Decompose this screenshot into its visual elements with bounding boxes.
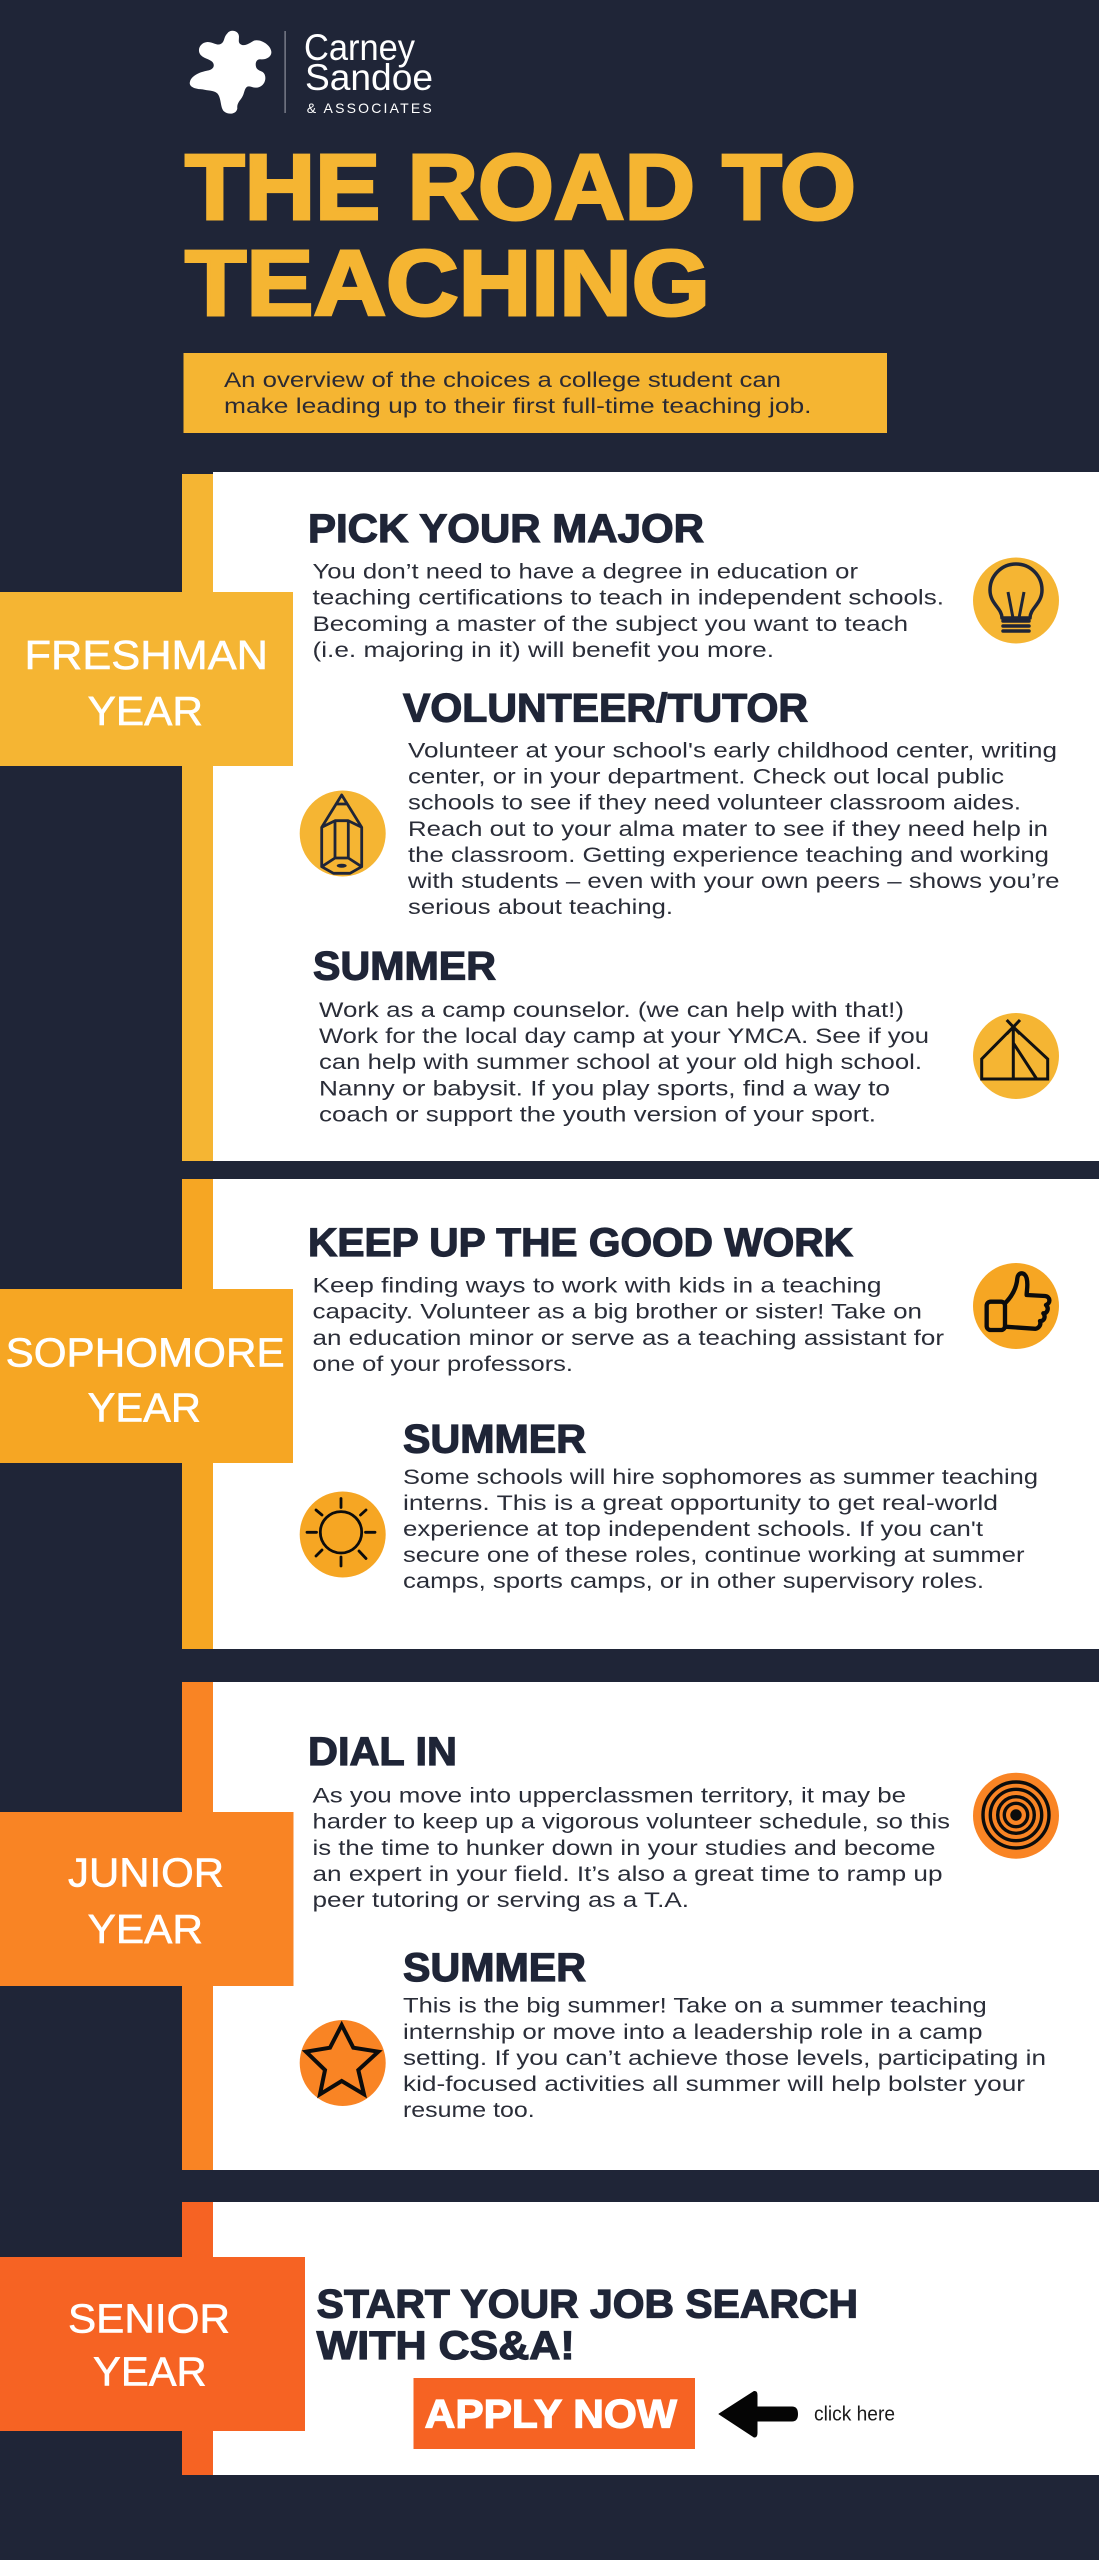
button: apply now: APPLY NOW bbox=[425, 2393, 678, 2437]
senior timeline bar bbox=[182, 2202, 213, 2475]
freshman content card bbox=[213, 472, 1099, 1161]
subtitle banner: make leading up to their first full-time teaching job. bbox=[224, 394, 812, 418]
text: freshman summer: Nanny or babysit. If you play sports, find a way to bbox=[319, 1076, 890, 1100]
title bbox=[185, 135, 856, 335]
text: sophomore summer: experience at top independent schools. If you can't bbox=[403, 1517, 983, 1541]
icon: light bulb bbox=[973, 558, 1059, 644]
junior timeline bar bbox=[182, 1682, 213, 2170]
text: sophomore summer: secure one of these roles, continue working at summer bbox=[403, 1543, 1024, 1567]
text: dial in: As you move into upperclassmen territory, it may be bbox=[312, 1784, 906, 1808]
panel: senior year bbox=[0, 2202, 1099, 2475]
text: freshman summer: coach or support the youth version of your sport. bbox=[319, 1102, 876, 1126]
icon: tent bbox=[973, 1013, 1059, 1099]
text: volunteer/tutor: Reach out to your alma mater to see if they need help in bbox=[408, 817, 1048, 841]
junior year label: JUNIOR bbox=[68, 1850, 224, 1896]
panel: freshman year bbox=[0, 472, 1099, 1161]
panel: sophomore year bbox=[0, 1179, 1099, 1649]
sophomore timeline bar bbox=[182, 1179, 213, 1649]
text: dial in: is the time to hunker down in your studies and become bbox=[312, 1836, 936, 1860]
text: pick your major: You don’t need to have a degree in education or bbox=[312, 560, 858, 584]
icon: pencil bbox=[300, 790, 386, 876]
subtitle banner: An overview of the choices a college student can bbox=[224, 368, 781, 392]
text: sophomore summer: camps, sports camps, or in other supervisory roles. bbox=[403, 1569, 984, 1593]
heading: junior summer: SUMMER bbox=[403, 1946, 586, 1990]
icon: puzzle piece bbox=[190, 31, 271, 114]
heading: start your job search: START YOUR JOB SEARCH bbox=[317, 2283, 858, 2327]
text: keep up the good work: Keep finding ways to work with kids in a teaching bbox=[312, 1274, 882, 1298]
heading: volunteer/tutor: VOLUNTEER/TUTOR bbox=[403, 687, 808, 731]
text: pick your major: teaching certifications to teach in independent schools. bbox=[312, 586, 944, 610]
text: junior summer: resume too. bbox=[403, 2098, 535, 2122]
title: THE ROAD TO bbox=[185, 135, 856, 239]
text: junior summer: This is the big summer! Take on a summer teaching bbox=[403, 1994, 987, 2018]
text: sophomore summer: Some schools will hire sophomores as summer teaching bbox=[403, 1465, 1038, 1489]
text: sophomore summer: interns. This is a great opportunity to get real-world bbox=[403, 1491, 998, 1515]
logo: Carney Sandoe & Associates bbox=[190, 27, 433, 116]
text: dial in: an expert in your field. It’s also a great time to ramp up bbox=[312, 1862, 943, 1886]
heading: start your job search: WITH CS&A! bbox=[317, 2324, 575, 2368]
logo: Carney Sandoe & Associates: & ASSOCIATES bbox=[307, 100, 432, 116]
panel: junior year bbox=[0, 1682, 1099, 2170]
text: volunteer/tutor: the classroom. Getting experience teaching and working bbox=[408, 843, 1049, 867]
senior content card bbox=[213, 2202, 1099, 2475]
junior content card bbox=[213, 1682, 1099, 2170]
sophomore year label bbox=[0, 1289, 293, 1463]
text: freshman summer: Work for the local day camp at your YMCA. See if you bbox=[319, 1024, 929, 1048]
text: volunteer/tutor: serious about teaching. bbox=[408, 895, 673, 919]
freshman timeline bar bbox=[182, 474, 213, 1161]
freshman year label: YEAR bbox=[88, 688, 203, 734]
text: volunteer/tutor: schools to see if they need volunteer classroom aides. bbox=[408, 791, 1021, 815]
icon: sun bbox=[300, 1492, 386, 1578]
text: junior summer: internship or move into a leadership role in a camp bbox=[403, 2020, 983, 2044]
freshman year label: FRESHMAN bbox=[24, 632, 268, 678]
heading: freshman summer: SUMMER bbox=[313, 945, 496, 989]
text: pick your major bbox=[312, 560, 944, 662]
text: volunteer/tutor: Volunteer at your school's early childhood center, writing bbox=[408, 738, 1057, 762]
text: freshman summer: Work as a camp counselor. (we can help with that!) bbox=[319, 998, 904, 1022]
junior year label bbox=[0, 1812, 294, 1986]
icon: star bbox=[300, 2020, 386, 2106]
text: junior summer: setting. If you can’t achieve those levels, participating in bbox=[403, 2046, 1046, 2070]
heading: dial in: DIAL IN bbox=[308, 1730, 457, 1774]
text: dial in: peer tutoring or serving as a T.A. bbox=[312, 1888, 689, 1912]
text: dial in bbox=[312, 1784, 950, 1912]
senior year label: YEAR bbox=[93, 2349, 207, 2395]
text: volunteer/tutor: with students – even with your own peers – shows you’re bbox=[407, 869, 1060, 893]
text: keep up the good work bbox=[312, 1274, 944, 1376]
text: pick your major: Becoming a master of the subject you want to teach bbox=[312, 612, 908, 636]
text: junior summer: kid-focused activities all summer will help bolster your bbox=[403, 2072, 1025, 2096]
title: TEACHING bbox=[185, 231, 710, 335]
logo: Carney Sandoe & Associates: Sandoe bbox=[305, 57, 433, 98]
text: keep up the good work: capacity. Volunteer as a big brother or sister! Take on bbox=[312, 1300, 922, 1324]
arrow: pointing to apply now bbox=[719, 2391, 798, 2437]
text: volunteer/tutor: center, or in your department. Check out local public bbox=[408, 765, 1004, 789]
senior year label bbox=[0, 2257, 305, 2431]
junior year label: YEAR bbox=[88, 1906, 203, 1952]
icon: thumbs up bbox=[973, 1263, 1059, 1349]
text: junior summer bbox=[403, 1994, 1046, 2122]
logo: Carney Sandoe & Associates: Carney bbox=[304, 27, 415, 68]
button: apply now bbox=[414, 2378, 695, 2449]
heading: start your job search bbox=[317, 2283, 858, 2368]
text: volunteer/tutor bbox=[407, 738, 1060, 919]
subtitle banner bbox=[184, 353, 887, 433]
text: freshman summer: can help with summer school at your old high school. bbox=[319, 1050, 922, 1074]
heading: pick your major: PICK YOUR MAJOR bbox=[308, 507, 704, 551]
sophomore year label: YEAR bbox=[88, 1385, 201, 1431]
icon: target bbox=[973, 1773, 1059, 1859]
heading: keep up the good work: KEEP UP THE GOOD WORK bbox=[308, 1221, 853, 1265]
text: keep up the good work: one of your professors. bbox=[312, 1352, 573, 1376]
text: freshman summer bbox=[319, 998, 929, 1126]
text: dial in: harder to keep up a vigorous volunteer schedule, so this bbox=[312, 1810, 950, 1834]
freshman year label bbox=[0, 592, 293, 766]
text: sophomore summer bbox=[403, 1465, 1038, 1593]
senior year label: SENIOR bbox=[68, 2296, 230, 2342]
text: pick your major: (i.e. majoring in it) will benefit you more. bbox=[312, 638, 774, 662]
heading: sophomore summer: SUMMER bbox=[403, 1418, 586, 1462]
text: keep up the good work: an education minor or serve as a teaching assistant for bbox=[312, 1326, 944, 1350]
sophomore year label: SOPHOMORE bbox=[6, 1330, 285, 1376]
sophomore content card bbox=[213, 1179, 1099, 1649]
text: click here: click here bbox=[814, 2404, 895, 2426]
